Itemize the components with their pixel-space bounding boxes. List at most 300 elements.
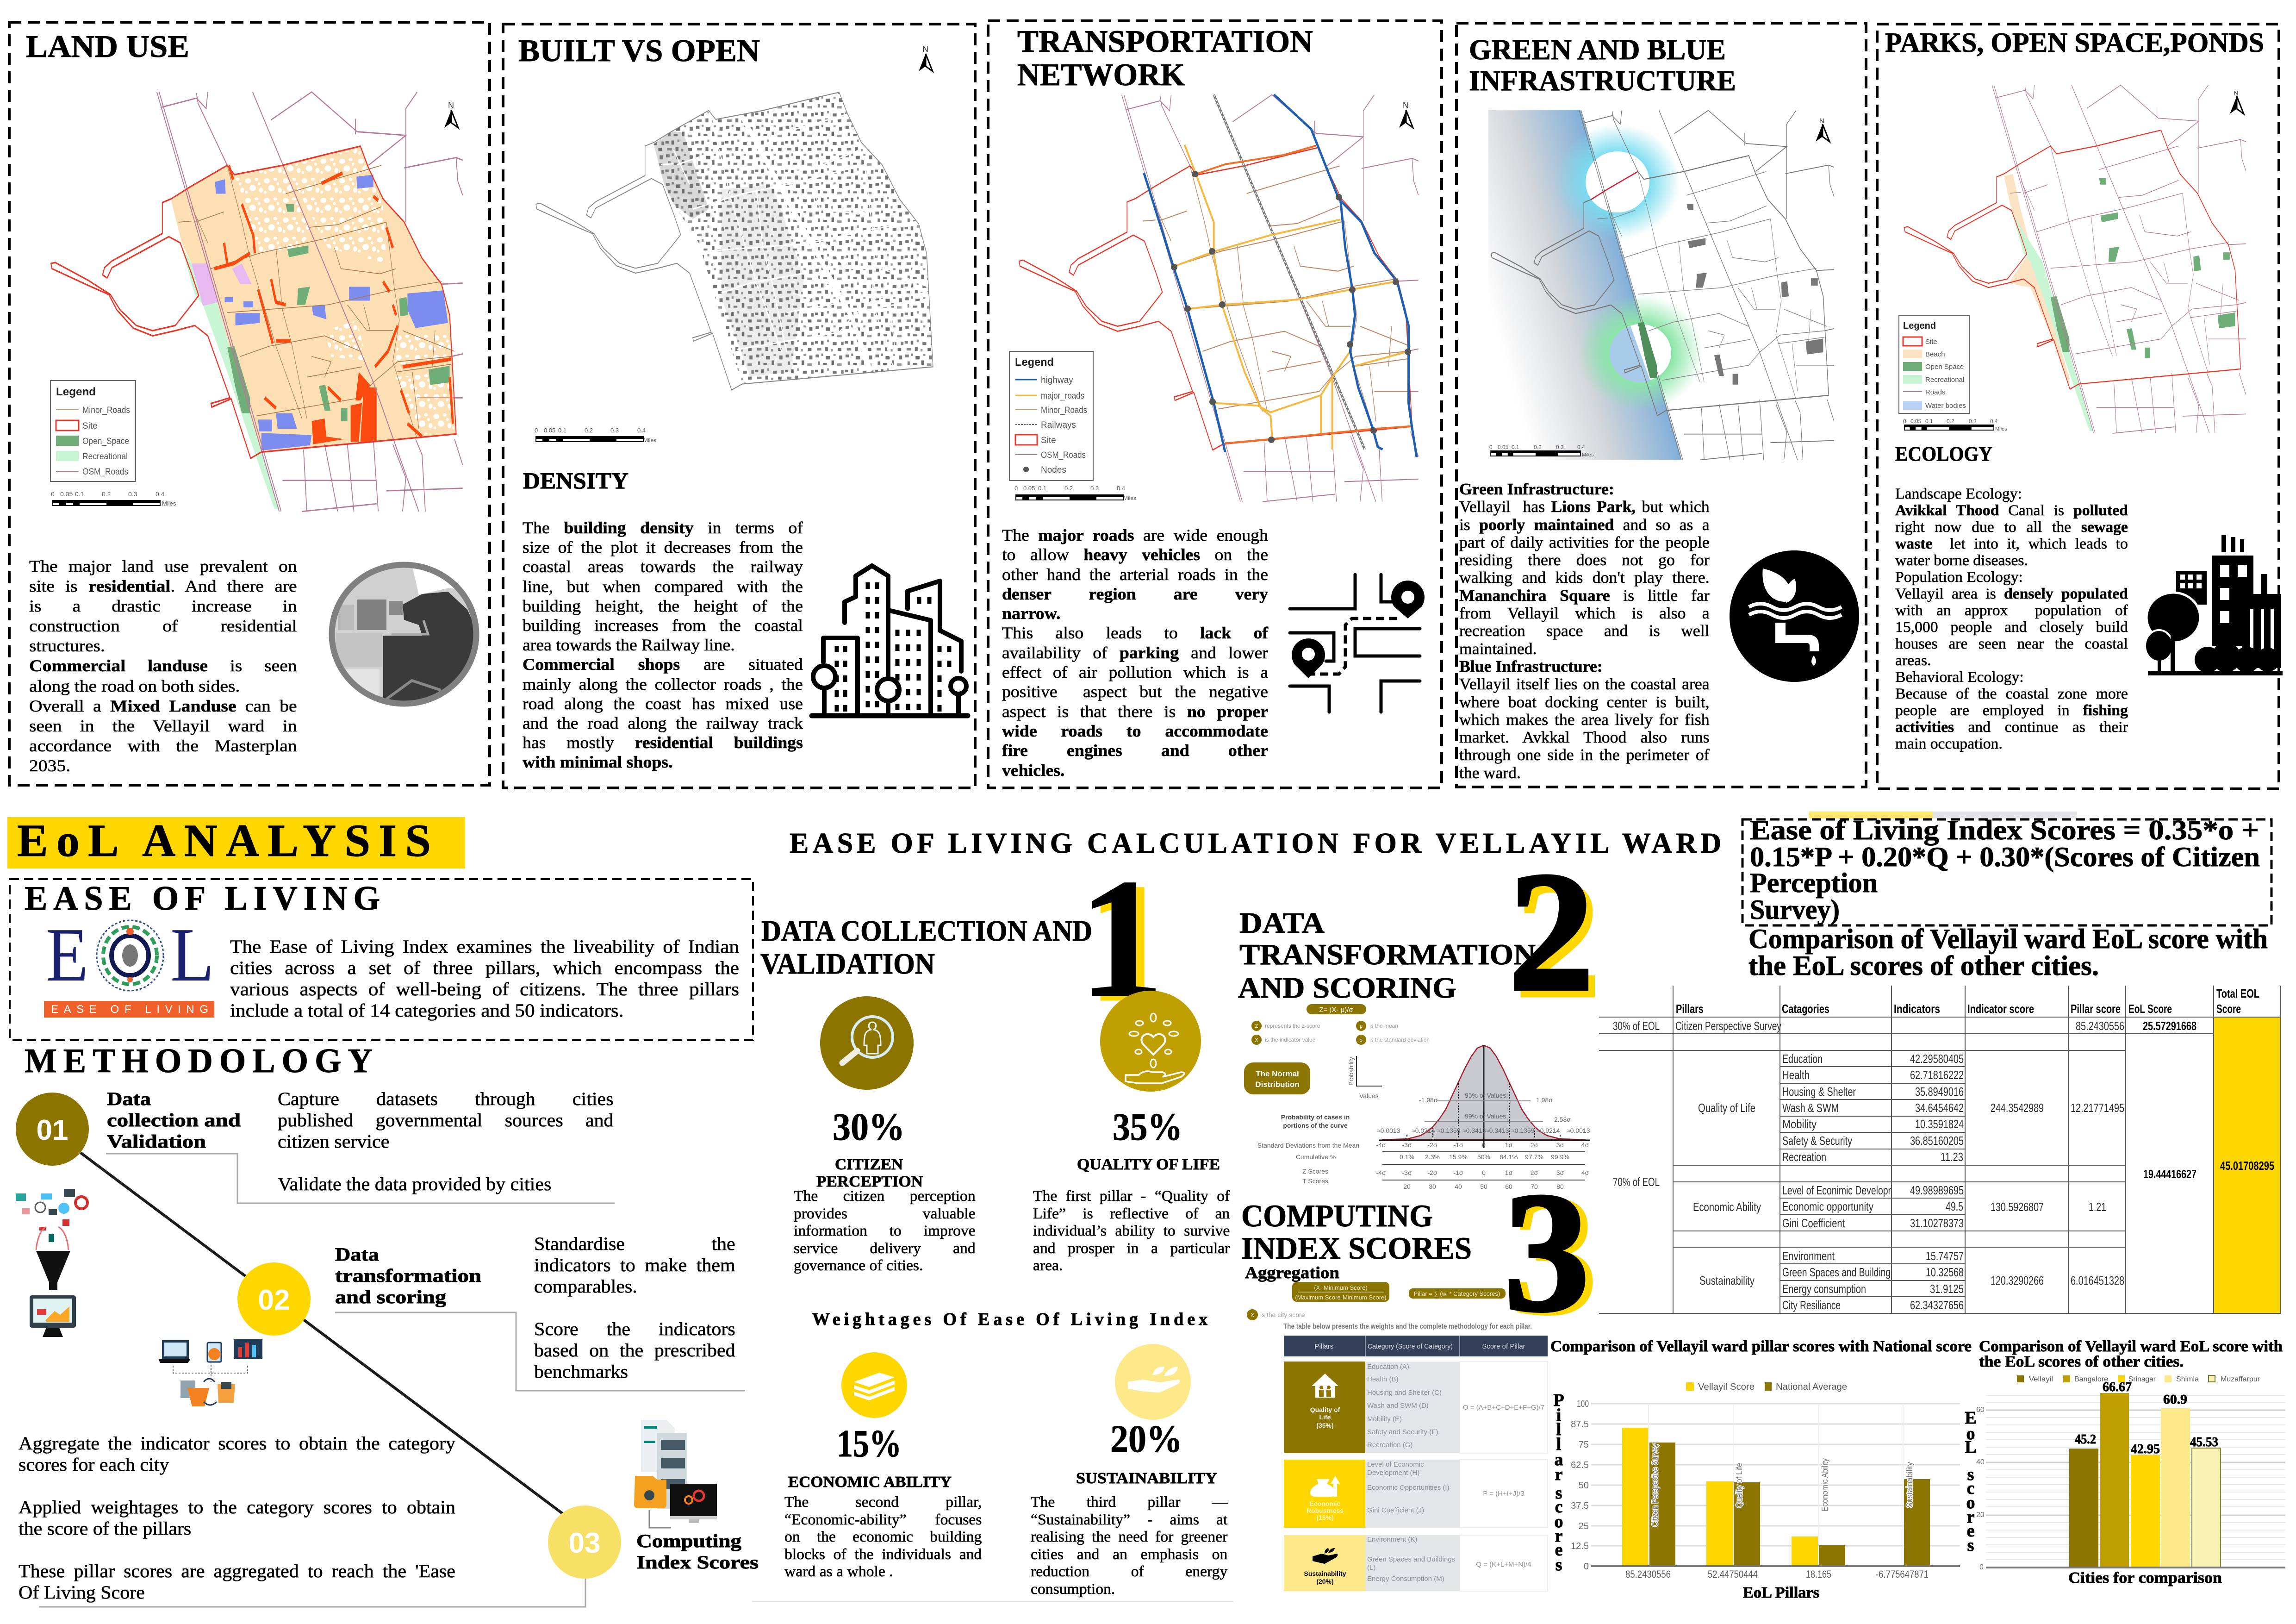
scale bar: land use: 0	[51, 490, 55, 498]
formula: z score: is the indicator value	[1265, 1037, 1316, 1043]
table: EoL score calculation: Pillars	[1676, 1002, 1704, 1016]
y axis title: o	[1966, 1493, 1975, 1512]
table: EoL score calculation: 85.2430556	[2076, 1019, 2124, 1033]
chart: normal distribution curve: -3σ	[1402, 1141, 1412, 1149]
y axis title: s	[1556, 1555, 1562, 1574]
text: economic ability: ward as a whole .	[784, 1563, 893, 1580]
formula box: ease of living index	[1742, 812, 2271, 925]
scale bar: parks: 0.3	[1969, 418, 1977, 425]
chart: normal distribution curve: ≈0.3413	[1486, 1127, 1509, 1134]
text: land use description: along the road on both sides.	[29, 677, 240, 695]
banner: EoL analysis: EoL ANALYSIS	[17, 815, 431, 866]
bar values: 66.67	[2103, 1380, 2132, 1394]
chart: EoL scores of cities: 40	[1976, 1458, 1985, 1466]
chart: normal distribution curve: 0	[1482, 1141, 1486, 1149]
table: EoL score calculation: 120.3290266	[1991, 1274, 2044, 1287]
step 02 heading: and scoring	[335, 1287, 446, 1307]
chart: normal distribution curve: 40	[1455, 1183, 1462, 1190]
text: density description: has mostly residential buildings	[523, 733, 803, 752]
chart: normal distribution curve: 15.9%	[1449, 1153, 1468, 1161]
table: EoL score calculation: 45.01708295	[2220, 1159, 2274, 1173]
text: green and blue description: Vellayil itself lies on the coastal area	[1459, 675, 1710, 693]
scale bar: land use: 0.4	[156, 490, 165, 498]
table: pillar methodology: Q = (K+L+M+N)/4	[1476, 1561, 1531, 1568]
text: green and blue description: maintained.	[1459, 640, 1537, 658]
chart: normal distribution curve: 95% of Values	[1465, 1092, 1506, 1099]
text: land use description: Commercial landuse is seen	[29, 656, 297, 675]
heading: parks: PARKS, OPEN SPACE,PONDS	[1885, 27, 2264, 58]
chart: normal distribution curve: 99% of Values	[1465, 1112, 1506, 1120]
table: pillar methodology: (35%)	[1316, 1422, 1334, 1429]
formula: z score: X	[1255, 1037, 1258, 1043]
y axis title: s	[1967, 1536, 1974, 1555]
step 03 heading: Index Scores	[636, 1552, 759, 1573]
chart: normal distribution curve: Z Scores	[1302, 1168, 1328, 1175]
text: density description: coastal areas towards the railway	[523, 557, 803, 576]
chart legend: Srinagar	[2128, 1375, 2156, 1383]
text: land use description: structures.	[29, 637, 105, 655]
text: land use description: construction of residential	[29, 617, 297, 635]
heading: computing index scores	[1241, 1198, 1472, 1266]
scale bar: built vs open	[535, 427, 656, 443]
table: EoL score calculation: Health	[1782, 1068, 1810, 1082]
legend: parks: Recreational	[1925, 376, 1964, 384]
legend: transportation: Nodes	[1041, 465, 1066, 475]
text: economic ability: on the economic building	[784, 1529, 982, 1545]
text: ecology description: Vellayil area is densely populated	[1895, 586, 2128, 602]
table: pillar methodology: Score of Pillar	[1482, 1343, 1525, 1350]
step 02 heading: transformation	[335, 1265, 481, 1286]
chart: normal distribution curve: ≈0.1359	[1511, 1127, 1535, 1134]
chart: pillar scores vs national: 18.165	[1806, 1568, 1831, 1580]
table: EoL score calculation: 31.10278373	[1910, 1216, 1964, 1230]
text: land use description: 2035.	[29, 756, 70, 775]
step 03 text: These pillar scores are aggregated to reach the 'Ease	[19, 1561, 455, 1581]
scale bar: parks: 0.2	[1947, 418, 1954, 425]
map: green and blue network	[1488, 110, 1834, 460]
chart: EoL scores of cities: 60	[1976, 1406, 1985, 1414]
scale bar: built vs open: Miles	[643, 437, 656, 443]
table: pillar methodology: Development (H)	[1367, 1469, 1419, 1477]
text: sustainability: realising the need for greener	[1031, 1529, 1227, 1545]
chart: normal distribution curve: 2.3%	[1425, 1153, 1440, 1161]
text: quality of life: and prosper in a particular	[1033, 1240, 1230, 1256]
chart: pillar scores vs national: 25	[1579, 1521, 1589, 1531]
table: EoL score calculation: Economic Ability	[1693, 1200, 1761, 1214]
category labels: Quality of Life	[1735, 1463, 1744, 1508]
chart: normal distribution curve: ≈0.3413	[1462, 1127, 1486, 1134]
table: EoL score calculation: Housing & Shelter	[1782, 1085, 1856, 1099]
heading: ecology: ECOLOGY	[1895, 443, 1992, 465]
scale bar: parks: 0.1	[1925, 418, 1933, 425]
text: transportation description: vehicles.	[1002, 761, 1064, 780]
map: built footprint	[536, 92, 933, 390]
table: pillar methodology: Health (B)	[1367, 1375, 1399, 1383]
table: pillar methodology: Robustness	[1307, 1507, 1344, 1514]
icon: money bag	[1310, 1476, 1340, 1497]
table: EoL score calculation: Indicator score	[1967, 1002, 2034, 1016]
step 03 heading	[636, 1530, 759, 1573]
heading: data transformation: AND SCORING	[1238, 971, 1456, 1004]
y axis title: s	[1967, 1465, 1974, 1484]
scale bar: land use: Miles	[162, 500, 176, 507]
text: land use description: accordance with the Masterplan	[29, 737, 297, 755]
formula: normalisation: (X- Minimum Score)	[1314, 1284, 1368, 1291]
step 02 marker	[237, 1262, 311, 1336]
chart: normal distribution curve: Standard Deviations from the Mean	[1257, 1142, 1359, 1149]
table: pillar methodology: Recreation (G)	[1367, 1441, 1412, 1449]
heading: transportation network: NETWORK	[1017, 57, 1185, 92]
scale bar: parks: Miles	[1995, 426, 2007, 432]
step 02 heading	[335, 1244, 481, 1307]
heading: comparison with other cities: Comparison of Vellayil ward EoL score with	[1748, 924, 2268, 954]
bar values: 45.53	[2190, 1435, 2218, 1449]
text: land use description: is a drastic increase in	[29, 597, 297, 615]
label: citizen perception: CITIZEN	[835, 1156, 903, 1173]
icon: north arrow: N	[922, 44, 928, 54]
chart: normal distribution curve: -4σ	[1376, 1169, 1386, 1176]
icon: north arrow	[919, 44, 933, 71]
text: ecology description: with an approx population of	[1895, 602, 2128, 619]
icon: sustainability	[1115, 1344, 1191, 1420]
heading: ease of living calculation: EASE OF LIVING CALCULATION FOR VELLAYIL WARD	[790, 828, 1721, 859]
text: citizen perception: governance of cities.	[794, 1257, 923, 1274]
table: pillar methodology: Category (Score of Category)	[1368, 1343, 1453, 1350]
legend: transportation: OSM_Roads	[1041, 450, 1086, 460]
step 02 marker: 02	[258, 1284, 290, 1316]
table: EoL score calculation: 25.57291668	[2143, 1019, 2196, 1033]
step 02 text: benchmarks	[534, 1361, 628, 1382]
numeral 1: 1	[1078, 843, 1164, 1033]
formula: z score: Z= (X- μ)/σ	[1319, 1006, 1353, 1014]
scale bar: parks: 0.05	[1910, 418, 1922, 425]
text: ecology description: Population Ecology:	[1895, 569, 2023, 586]
scale bar: built vs open: 0.4	[637, 427, 646, 434]
table: EoL score calculation: 35.8949016	[1915, 1085, 1964, 1099]
x axis title: Cities for comparison	[2068, 1569, 2222, 1587]
chart: normal distribution curve: -4σ	[1376, 1141, 1386, 1149]
legend: land use: Open_Space	[82, 437, 129, 446]
chart: normal distribution curve: 2σ	[1531, 1141, 1538, 1149]
icon: quality of life	[1100, 991, 1201, 1092]
text: land use description: seen in the Vellayil ward in	[29, 717, 297, 735]
scale bar: green: 0.1	[1512, 444, 1519, 450]
scale bar: built vs open: 0.2	[585, 427, 593, 434]
table: pillar methodology: (20%)	[1316, 1578, 1334, 1585]
text: ecology description: Behavioral Ecology:	[1895, 669, 2024, 686]
note: table intro: The table below presents the weights and the complete methodology for each pillar.	[1283, 1323, 1532, 1330]
text: green and blue description: part of daily activities for the people	[1459, 533, 1710, 551]
chart: normal distribution curve: 84.1%	[1500, 1153, 1518, 1161]
text: economic ability	[784, 1494, 988, 1587]
y axis title: r	[1555, 1465, 1563, 1484]
heading: data transformation: TRANSFORMATION	[1239, 938, 1536, 971]
chart: EoL scores of cities: 0	[1979, 1563, 1984, 1571]
chart legend: Vellayil	[2029, 1375, 2053, 1383]
chart: pillar scores vs national: 37.5	[1571, 1501, 1589, 1511]
table: EoL score calculation: 19.44416627	[2143, 1167, 2196, 1181]
category labels: Citizen Perspective Survey	[1650, 1443, 1660, 1527]
text: ecology description: main occupation.	[1895, 736, 2003, 752]
bars	[1622, 1428, 1930, 1566]
icon: north arrow	[1816, 117, 1829, 142]
chart: normal distribution curve: ≈0.0013	[1567, 1127, 1590, 1134]
chart: normal distribution curve: -3σ	[1402, 1169, 1412, 1176]
text: green and blue description: recreation space and is well	[1459, 622, 1710, 640]
chart: pillar scores vs national: 0	[1584, 1562, 1589, 1572]
bar values: 45.2	[2075, 1432, 2096, 1447]
panel: parks, open space, ponds	[1877, 24, 2283, 789]
heading: green and blue infrastructure: INFRASTRUCTURE	[1469, 65, 1736, 97]
chart: normal distribution curve: 0	[1482, 1169, 1486, 1176]
chart: normal distribution curve: 4σ	[1581, 1169, 1589, 1176]
numeral 2: 2	[1515, 843, 1600, 1033]
step 03 text: Aggregate the indicator scores to obtain the category	[19, 1433, 455, 1454]
chart: normal distribution curve: 30	[1429, 1183, 1436, 1190]
text: land use description: site is residential. And there are	[29, 577, 297, 595]
text: land use description: The major land use prevalent on	[29, 557, 297, 575]
legend: parks: Site	[1925, 338, 1937, 346]
text: density description: line, but when compared with the	[523, 577, 803, 596]
heading: comparison with other cities: the EoL scores of other cities.	[1748, 950, 2099, 981]
formula box: ease of living index: Survey)	[1750, 894, 1840, 925]
formula box: ease of living index: 0.15*P + 0.20*Q + 0.30*(Scores of Citizen	[1750, 842, 2260, 872]
chart: pillar scores vs national: 50	[1579, 1480, 1589, 1491]
table: pillar methodology	[1284, 1336, 1548, 1591]
y axis title: o	[1554, 1512, 1563, 1531]
chart: normal distribution curve: 60	[1505, 1183, 1512, 1190]
chart: normal distribution curve: 1.98σ	[1536, 1096, 1553, 1104]
text: transportation description: aspect is that there is no proper	[1002, 702, 1268, 721]
y axis title: c	[1967, 1479, 1974, 1498]
heading: weightages: Weightages Of Ease Of Living Index	[812, 1310, 1207, 1329]
chart: pillar scores vs national	[1550, 1338, 1972, 1601]
chart legend	[2017, 1375, 2260, 1383]
section: data transformation and scoring	[1238, 837, 1600, 1190]
formula: z score: is the mean	[1369, 1023, 1398, 1029]
scale bar: transportation: 0.1	[1038, 485, 1046, 492]
heading: green and blue infrastructure: GREEN AND BLUE	[1469, 34, 1726, 66]
text: density description: with minimal shops.	[523, 753, 673, 771]
text: green and blue description: is poorly maintained and so as a	[1459, 516, 1710, 534]
table: EoL score calculation: Pillar score	[2071, 1002, 2121, 1016]
chart title: the EoL scores of other cities.	[1979, 1353, 2184, 1370]
text: economic ability: blocks of the individuals and	[784, 1546, 982, 1563]
numeral 3: 3	[1504, 1157, 1589, 1347]
text: green and blue description: Blue Infrastructure:	[1459, 657, 1603, 675]
text: transportation description: wide roads to accommodate	[1002, 722, 1268, 740]
legend: transportation: highway	[1041, 375, 1073, 385]
text: green and blue description: residing there does not go for	[1459, 551, 1710, 569]
text: green and blue description: Mananchira Square is little far	[1459, 587, 1710, 605]
text: density description: Commercial shops are situated	[523, 655, 803, 674]
scale bar: land use: 0.1	[75, 490, 84, 498]
chart: normal distribution curve: 4σ	[1581, 1141, 1589, 1149]
formula: pillar: Pillar = ∑ (wi * Category Scores)	[1414, 1290, 1500, 1297]
chart: pillar scores vs national: 85.2430556	[1625, 1568, 1671, 1580]
text: sustainability: “Sustainability” - aims at	[1031, 1511, 1227, 1528]
note: city score: X	[1251, 1312, 1254, 1318]
text: green and blue description: walking and kids don't play there.	[1459, 568, 1710, 587]
text: density description: road along the coast has mixed use	[523, 694, 803, 713]
chart: normal distribution curve: 70	[1531, 1183, 1538, 1190]
chart: normal distribution curve: 2σ	[1531, 1169, 1538, 1176]
text: transportation description: This also leads to lack of	[1002, 624, 1268, 642]
label: citizen perception: PERCEPTION	[816, 1173, 923, 1190]
table: EoL score calculation: City Resiliance	[1782, 1298, 1841, 1312]
panel: land use	[9, 22, 490, 785]
heading: data collection	[760, 914, 1092, 980]
label: the normal distribution: Distribution	[1255, 1080, 1300, 1089]
text: transportation description	[1002, 525, 1280, 785]
heading: data transformation: DATA	[1239, 906, 1325, 939]
text: citizen perception: The citizen perception	[794, 1188, 976, 1205]
table: pillar methodology: Wash and SWM (D)	[1367, 1402, 1429, 1410]
chart: normal distribution curve: 97.7%	[1525, 1153, 1543, 1161]
chart: normal distribution curve: Probability	[1347, 1057, 1355, 1086]
scale bar: built vs open: 0.1	[558, 427, 566, 434]
text: citizen perception: service delivery and	[794, 1240, 976, 1256]
formula: z score: μ	[1360, 1024, 1363, 1029]
text: green and blue description: through one side in the perimeter of	[1459, 746, 1710, 764]
text: ecology description: Avikkal Thood Canal is polluted	[1895, 502, 2128, 519]
table: EoL score calculation: 12.21771495	[2071, 1101, 2124, 1115]
text: land use description: Overall a Mixed Landuse can be	[29, 697, 297, 715]
numeral 3: 3	[1512, 1160, 1597, 1350]
chart: normal distribution curve: 1σ	[1505, 1141, 1513, 1149]
value: 30 percent: 30%	[833, 1106, 905, 1149]
legend: transportation: major_roads	[1041, 391, 1084, 401]
step 02 text: based on the prescribed	[534, 1340, 735, 1361]
table: EoL score calculation: 1.21	[2089, 1200, 2106, 1214]
y axis title: o	[1966, 1424, 1975, 1443]
chart: normal distribution curve: Values	[1359, 1092, 1379, 1099]
table: EoL score calculation: Energy consumption	[1782, 1282, 1866, 1296]
text: economic ability: The second pillar,	[784, 1494, 982, 1511]
scale bar: transportation: 0.2	[1064, 485, 1073, 492]
scale bar: green: 0.05	[1498, 444, 1509, 450]
text: density description: building increases from the coastal	[523, 616, 803, 635]
text: ecology description: 15,000 people and closely build	[1895, 619, 2128, 636]
chart: normal distribution curve: 0.1%	[1400, 1153, 1414, 1161]
icon: hand with leaf	[1313, 1548, 1338, 1564]
table: pillar methodology: Environment (K)	[1367, 1536, 1417, 1543]
step 01 text: published governmental sources and	[278, 1110, 614, 1131]
chart: normal distribution curve: -1σ	[1453, 1169, 1463, 1176]
category labels	[1650, 1443, 1914, 1527]
text: density description: size of the plot it decreases from the	[523, 538, 803, 556]
bar values: 60.9	[2163, 1393, 2187, 1407]
map: road network	[1019, 94, 1419, 502]
label: the normal distribution: The Normal	[1256, 1069, 1299, 1078]
chart title: Comparison of Vellayil ward pillar scores with National score	[1550, 1338, 1972, 1355]
step 02 text: indicators to make them	[534, 1255, 735, 1275]
table: pillar methodology: (15%)	[1316, 1514, 1334, 1521]
chart: normal distribution curve: T Scores	[1302, 1177, 1328, 1185]
heading: transportation network	[1017, 24, 1313, 92]
y axis title: E	[1965, 1408, 1977, 1428]
legend: parks	[1899, 315, 1969, 413]
chart: normal distribution curve: ≈0.1359	[1437, 1127, 1461, 1134]
step 03 text: Applied weightages to the category scores to obtain	[19, 1497, 455, 1518]
numeral 1: 1	[1087, 848, 1173, 1038]
scale bar: green: 0.3	[1556, 444, 1564, 450]
formula box: ease of living index: Perception	[1750, 868, 1878, 898]
text: transportation description: fire engines and other	[1002, 741, 1268, 760]
table: EoL score calculation: Score	[2216, 1002, 2241, 1016]
table: EoL score calculation: Citizen Perspective Survey	[1675, 1019, 1781, 1033]
table: EoL score calculation: Economic opportunity	[1782, 1199, 1873, 1213]
step 03 marker	[548, 1505, 621, 1579]
logo: ease of living: E	[46, 912, 88, 997]
chart: normal distribution curve: Probability of cases in	[1281, 1113, 1350, 1121]
chart: normal distribution curve: 20	[1403, 1183, 1411, 1190]
text: quality of life: individual’s ability to survive	[1033, 1223, 1230, 1239]
table: pillar methodology: P = (H+I+J)/3	[1483, 1490, 1524, 1498]
heading: built vs open: BUILT VS OPEN	[518, 33, 760, 68]
logo: ease of living: L	[170, 912, 214, 997]
icon: server and computer	[634, 1420, 717, 1528]
heading: data transformation	[1238, 906, 1536, 1004]
step 03 text: scores for each city	[19, 1454, 169, 1475]
step 01 text: citizen service	[278, 1131, 389, 1152]
bar values: 42.95	[2131, 1442, 2160, 1456]
scale bar: built vs open: 0	[535, 427, 538, 434]
text: ease of living description: cities across a set of three pillars, which encompass the	[230, 957, 739, 978]
table: pillar methodology: Level of Economic	[1367, 1461, 1424, 1468]
table: EoL score calculation: EoL Score	[2128, 1002, 2172, 1016]
table: EoL score calculation: 11.23	[1941, 1150, 1963, 1164]
formula: z score: Z	[1255, 1024, 1258, 1029]
table: pillar methodology: Education (A)	[1367, 1363, 1409, 1371]
text: economic ability: “Economic-ability” focuses	[784, 1511, 982, 1528]
chart: normal distribution curve: portions of the curve	[1283, 1122, 1348, 1129]
icon: north arrow	[444, 101, 458, 128]
legend: transportation: Site	[1041, 436, 1056, 445]
y axis title: c	[1555, 1497, 1562, 1517]
table: EoL score calculation: 10.32568	[1926, 1265, 1964, 1279]
table: EoL score calculation: Wash & SWM	[1782, 1101, 1839, 1115]
panel: built vs open	[503, 24, 975, 788]
panel: methodology	[16, 1042, 759, 1607]
text: quality of life	[1033, 1188, 1237, 1280]
text: green and blue description: which makes the area lively for fish	[1459, 711, 1710, 729]
text: density description: building height, the height of the	[523, 597, 803, 615]
legend: parks: Water bodies	[1925, 402, 1966, 410]
table: pillar methodology: Life	[1319, 1413, 1331, 1421]
scale bar: parks: 0	[1903, 418, 1906, 425]
text: ecology description: areas.	[1895, 652, 1931, 669]
text: green and blue description: market. Avkkal Thood also runs	[1459, 728, 1710, 746]
step 02 heading: Data	[335, 1244, 379, 1265]
legend: land use: Minor_Roads	[82, 406, 130, 415]
x axis title: EoL Pillars	[1743, 1584, 1819, 1601]
step 01 marker	[16, 1093, 89, 1166]
heading: transportation network: TRANSPORTATION	[1017, 24, 1313, 59]
text: sustainability: cities and an emphasis on	[1031, 1546, 1227, 1563]
chart: normal distribution curve: ≈0.0214	[1412, 1127, 1435, 1134]
text: land use description	[29, 556, 307, 783]
text: transportation description: denser region are very	[1002, 585, 1268, 603]
table: pillar methodology: Quality of	[1310, 1406, 1340, 1413]
text: ecology description: waste let into it, which leads to	[1895, 536, 2128, 552]
icon: water and leaf	[1730, 550, 1859, 682]
heading: ease of living: EASE OF LIVING	[25, 880, 380, 918]
panel: transportation network	[988, 21, 1442, 788]
step 02 text: Standardise the	[534, 1233, 735, 1254]
text: green and blue description: Green Infrastructure:	[1459, 481, 1614, 498]
legend: transportation: Legend	[1015, 356, 1054, 369]
